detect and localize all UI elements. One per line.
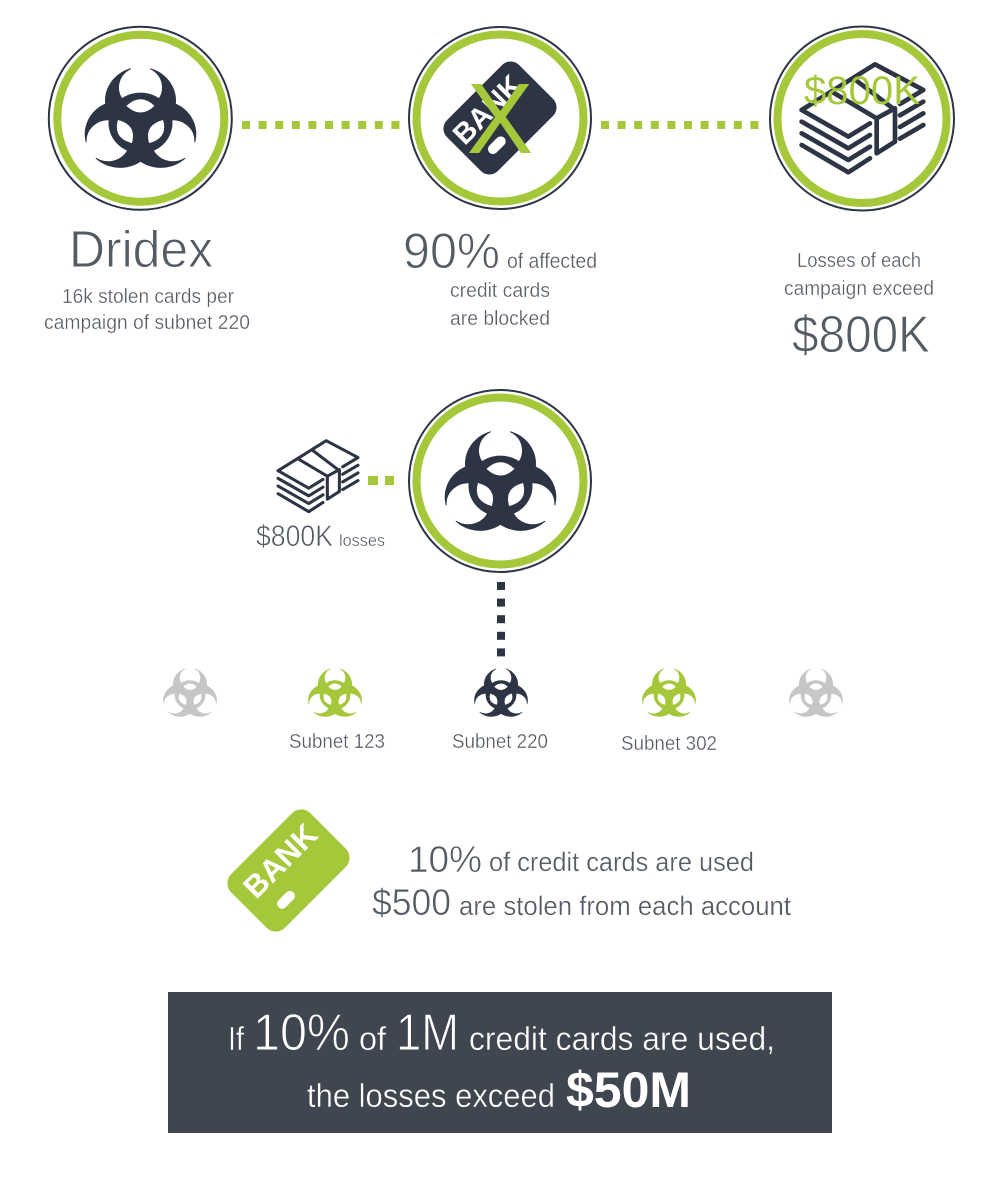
- text: $800K losses: $800K: [256, 520, 333, 553]
- dotted connector: losses: [368, 476, 394, 485]
- dotted connector: Dridex to card: [242, 121, 399, 129]
- icon: subnet 123 biohazard: [303, 669, 367, 722]
- text: 90% blocked: 90%: [403, 223, 500, 279]
- icon: biohazard badge: [49, 27, 232, 210]
- icon: green bank card: [222, 804, 355, 937]
- text: campaign losses: campaign exceed: [784, 278, 934, 300]
- icon: money stack badge: $800K: [804, 69, 920, 113]
- icon: grey biohazard right: [784, 669, 848, 722]
- text: card usage stats: 10%: [408, 839, 482, 880]
- icon: small money stack: [278, 441, 358, 512]
- icon: blocked bank card badge: [409, 27, 591, 209]
- icon: central biohazard badge: [409, 390, 591, 572]
- text: campaign losses: $800K: [792, 306, 930, 364]
- text: card usage stats: [372, 839, 791, 923]
- icon: subnet 302 biohazard: [637, 669, 701, 722]
- text: card usage stats: are stolen from each account: [459, 891, 791, 921]
- icon: subnet 220 biohazard: [469, 669, 533, 722]
- label: Subnet 220: Subnet 220: [452, 731, 548, 753]
- text: Dridex heading: [44, 221, 250, 334]
- panel: total losses callout: [168, 992, 832, 1133]
- icon: green bank card: BANK: [236, 816, 325, 905]
- panel: total losses callout: If: [228, 1020, 245, 1057]
- text: Dridex heading: 16k stolen cards per: [62, 286, 234, 308]
- icon: money stack badge: [770, 26, 954, 210]
- text: 90% blocked: [403, 223, 597, 330]
- text: Dridex heading: Dridex: [69, 221, 213, 279]
- text: $800K losses: losses: [339, 531, 385, 550]
- icon: blocked bank card badge: BANK: [447, 69, 529, 151]
- text: Dridex heading: campaign of subnet 220: [44, 312, 250, 334]
- text: 90% blocked: of affected: [507, 250, 597, 273]
- text: card usage stats: $500: [372, 882, 451, 923]
- label: Subnet 302: Subnet 302: [621, 733, 717, 755]
- text: 90% blocked: are blocked: [450, 308, 550, 330]
- panel: total losses callout: $50M: [566, 1062, 691, 1118]
- icon: blocked bank card badge: X: [467, 63, 533, 175]
- panel: total losses callout: the losses exceed: [307, 1077, 555, 1114]
- panel: total losses callout: of: [359, 1020, 387, 1057]
- panel: total losses callout: 10%: [253, 1004, 350, 1062]
- text: $800K losses: [256, 520, 385, 553]
- icon: grey biohazard left: [158, 669, 222, 722]
- text: 90% blocked: credit cards: [450, 280, 550, 302]
- dotted connector: card to money: [601, 121, 758, 129]
- label: Subnet 123: Subnet 123: [289, 731, 385, 753]
- panel: total losses callout: 1M: [396, 1004, 459, 1062]
- panel: total losses callout: credit cards are used,: [469, 1020, 775, 1057]
- dotted connector: vertical: [497, 582, 505, 656]
- text: campaign losses: Losses of each: [797, 250, 921, 272]
- text: campaign losses: [784, 250, 934, 364]
- text: card usage stats: of credit cards are used: [489, 847, 754, 877]
